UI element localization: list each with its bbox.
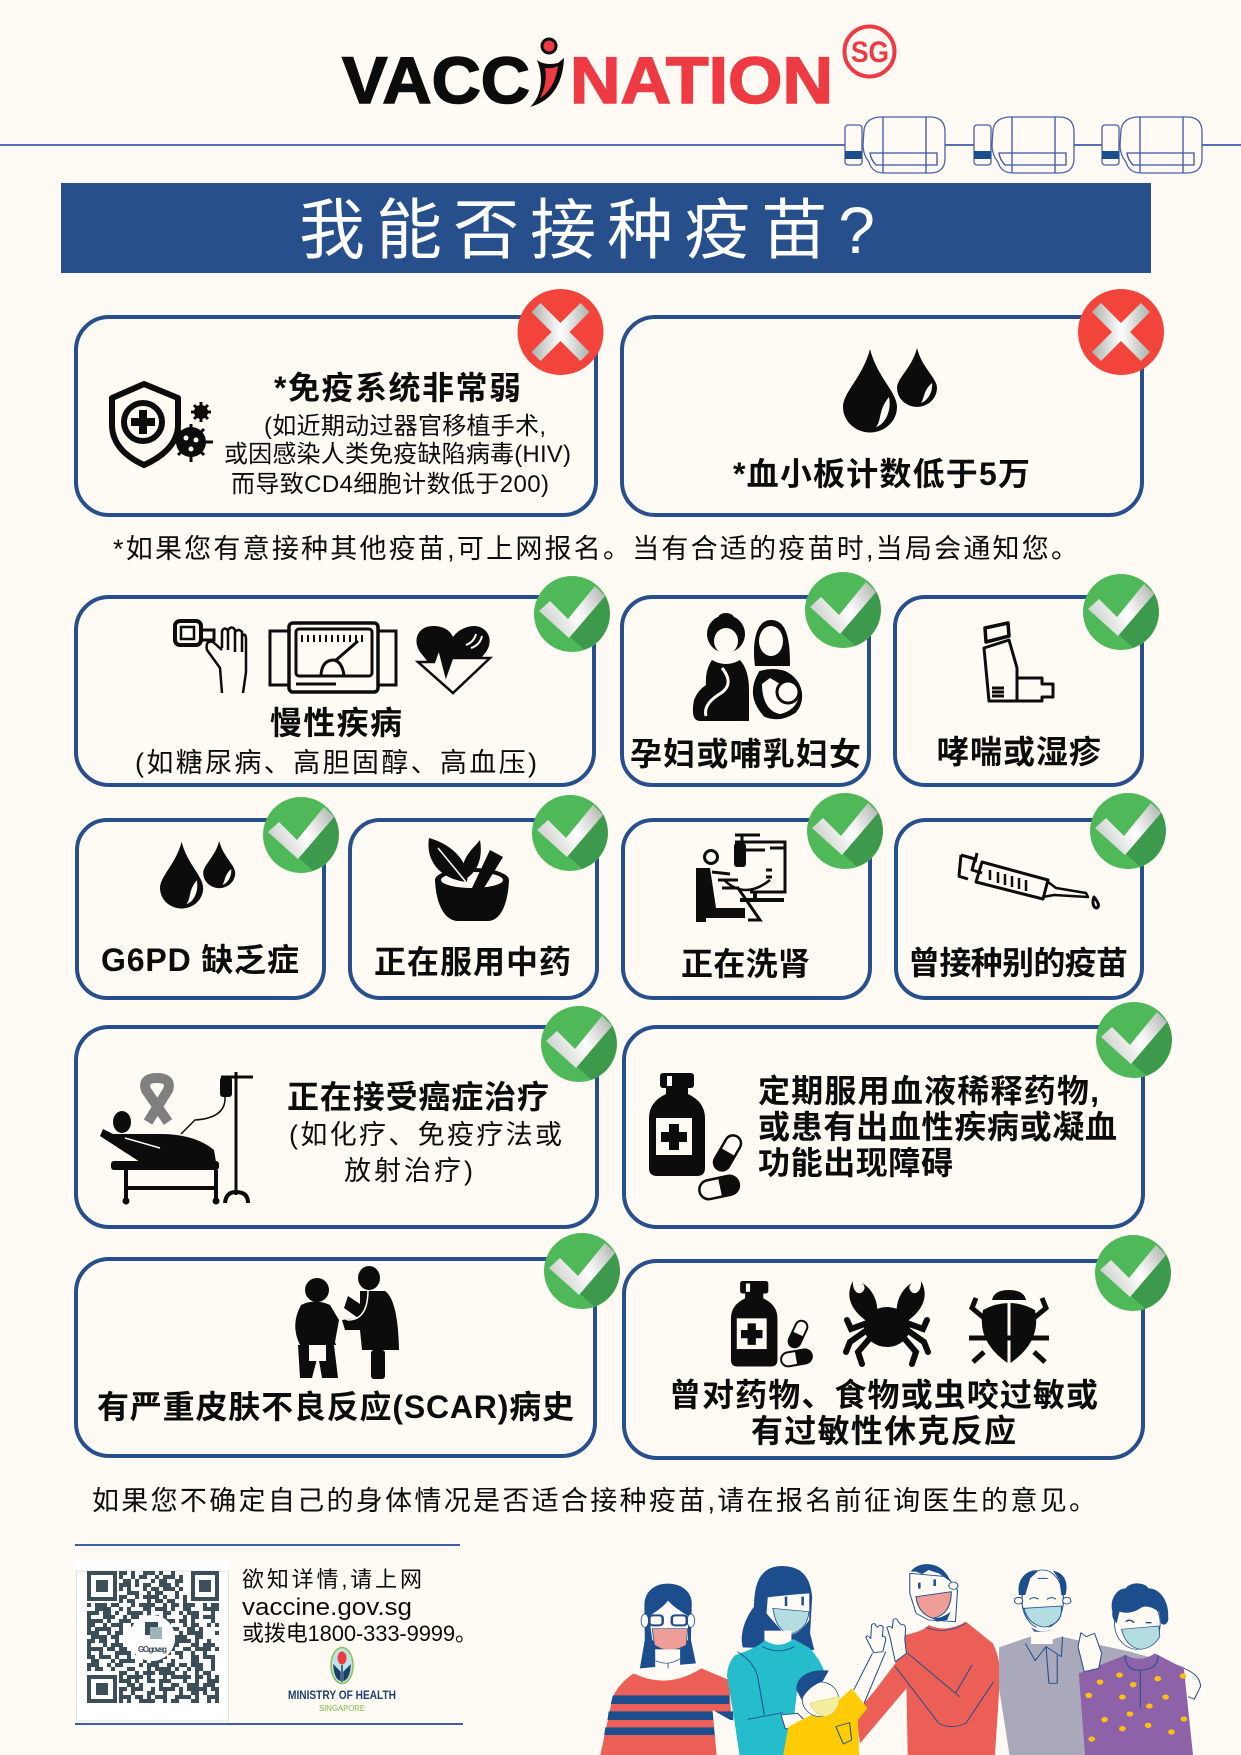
contact text: 或拨电1800-333-9999。 (242, 1621, 477, 1646)
icon: check badge (1096, 1002, 1172, 1078)
label: 曾接种别的疫苗 (908, 945, 1128, 981)
logo: Vaccination SG (342, 26, 894, 117)
title bar: 我能否接种疫苗? (299, 193, 875, 267)
contact text: vaccine.gov.sg (242, 1594, 412, 1621)
heading: *免疫系统非常弱 (274, 370, 521, 406)
icon: crab (846, 1281, 928, 1364)
panel: SCAR history (76, 1233, 620, 1456)
icon: beetle (969, 1290, 1049, 1364)
panel: blood thinners (624, 1002, 1172, 1227)
text block: 或患有出血性疾病或凝血 (758, 1109, 1117, 1145)
logo: Ministry of Health: SINGAPORE (319, 1704, 365, 1713)
panel: traditional medicine (350, 795, 608, 998)
footer rule bottom (75, 1723, 463, 1725)
icon: doctor and patient (295, 1266, 399, 1379)
logo: Vaccination SG: VACC (342, 43, 530, 117)
icon: blood pressure monitor (270, 623, 396, 692)
description (289, 1120, 562, 1186)
text block: 定期服用血液稀释药物, (758, 1073, 1099, 1109)
icon: check badge (1095, 1235, 1171, 1311)
panel: G6PD deficiency (77, 797, 339, 998)
QR code: GO.gov.sg (138, 1645, 167, 1654)
panel: chronic illness (76, 576, 610, 785)
note: other vaccines: *如果您有意接种其他疫苗,可上网报名。当有合适的疫苗时,当局会通知您。 (113, 534, 1078, 564)
panel: dialysis (623, 793, 883, 998)
label: 孕妇或哺乳妇女 (630, 736, 861, 772)
QR code (76, 1560, 229, 1721)
icon: glucose meter hand (175, 621, 246, 693)
icon: medicine bottle and pills (649, 1073, 744, 1201)
heading: 正在接受癌症治疗 (287, 1079, 549, 1115)
label: 有严重皮肤不良反应(SCAR)病史 (97, 1389, 574, 1425)
note: consult doctor: 如果您不确定自己的身体情况是否适合接种疫苗,请在报名前征询医生的意见。 (92, 1486, 1096, 1516)
description: 或因感染人类免疫缺陷病毒(HIV) (224, 441, 571, 468)
icon: inhaler (984, 623, 1053, 701)
heading: 慢性疾病 (270, 705, 402, 741)
icon: herb bowl (428, 838, 509, 921)
person: woman in striped sweater (600, 1584, 733, 1755)
icon: blood drops (843, 348, 937, 432)
icon: check badge (807, 793, 883, 869)
header rule (0, 144, 1241, 146)
icon: cross badge (1078, 289, 1164, 375)
icon: check badge (805, 572, 881, 648)
description: (如近期动过器官移植手术, (264, 413, 546, 440)
icon: vaccine vial 2 (974, 117, 1074, 173)
icon: check badge (534, 576, 610, 652)
icon: vaccine vial 3 (1102, 117, 1202, 173)
contact text: 欲知详情,请上网 (242, 1567, 422, 1592)
description: 放射治疗) (344, 1156, 473, 1186)
logo: Ministry of Health (288, 1648, 396, 1713)
icon: check badge (263, 797, 339, 873)
icon: check badge (1083, 574, 1159, 650)
description: 而导致CD4细胞计数低于200) (231, 471, 549, 498)
person: woman in teal sweater (727, 1566, 825, 1755)
person: man in red sweater (856, 1564, 1000, 1755)
icon: check badge (1090, 793, 1166, 869)
icon: mother figures (693, 613, 801, 721)
text block (669, 1377, 1098, 1449)
person: grey-shirted older man (999, 1570, 1200, 1755)
contact text (242, 1567, 477, 1646)
icon: blood drops (160, 841, 235, 909)
panel: low platelet (not eligible) (622, 289, 1164, 515)
illustration: masked family group (600, 1564, 1200, 1755)
panel: other vaccines received (896, 793, 1166, 998)
icon: heart with pulse (416, 626, 490, 693)
icon: cross badge (518, 289, 604, 375)
person: boy in yellow shirt (783, 1624, 886, 1755)
description: (如糖尿病、高胆固醇、高血压) (135, 748, 537, 778)
title bar (61, 183, 1151, 273)
label: 正在服用中药 (374, 944, 571, 980)
label: 哮喘或湿疹 (937, 734, 1101, 770)
icon: medicine bottle and pills (731, 1281, 813, 1367)
logo: Vaccination SG: SG (851, 36, 889, 69)
text block: 有过敏性休克反应 (751, 1413, 1016, 1449)
panel: pregnant or breastfeeding (622, 572, 881, 785)
description: (如化疗、免疫疗法或 (289, 1120, 562, 1150)
heading: *血小板计数低于5万 (733, 456, 1030, 492)
icon: check badge (541, 1006, 617, 1082)
icon: shield and virus (112, 384, 213, 465)
description (224, 413, 571, 498)
icon: vaccine vial 1 (845, 117, 945, 173)
icon: syringe (958, 853, 1098, 908)
icon: check badge (532, 795, 608, 871)
label: 正在洗肾 (681, 946, 810, 982)
panel: allergies (624, 1235, 1171, 1458)
panel: asthma or eczema (895, 574, 1159, 785)
icon: patient on IV (100, 1072, 253, 1204)
text block (758, 1073, 1117, 1181)
panel: cancer treatment (76, 1006, 617, 1227)
logo: Ministry of Health: MINISTRY OF HEALTH (288, 1690, 396, 1702)
icon: dialysis patient (696, 835, 785, 922)
icon: check badge (544, 1233, 620, 1309)
label: G6PD 缺乏症 (101, 942, 299, 978)
footer rule top (75, 1544, 460, 1546)
logo: Vaccination SG: NATION (570, 43, 833, 117)
text block: 曾对药物、食物或虫咬过敏或 (669, 1377, 1098, 1413)
panel: immune system (not eligible) (76, 289, 604, 515)
person: woman in purple dotted blouse (1078, 1583, 1193, 1755)
text block: 功能出现障碍 (758, 1145, 953, 1181)
